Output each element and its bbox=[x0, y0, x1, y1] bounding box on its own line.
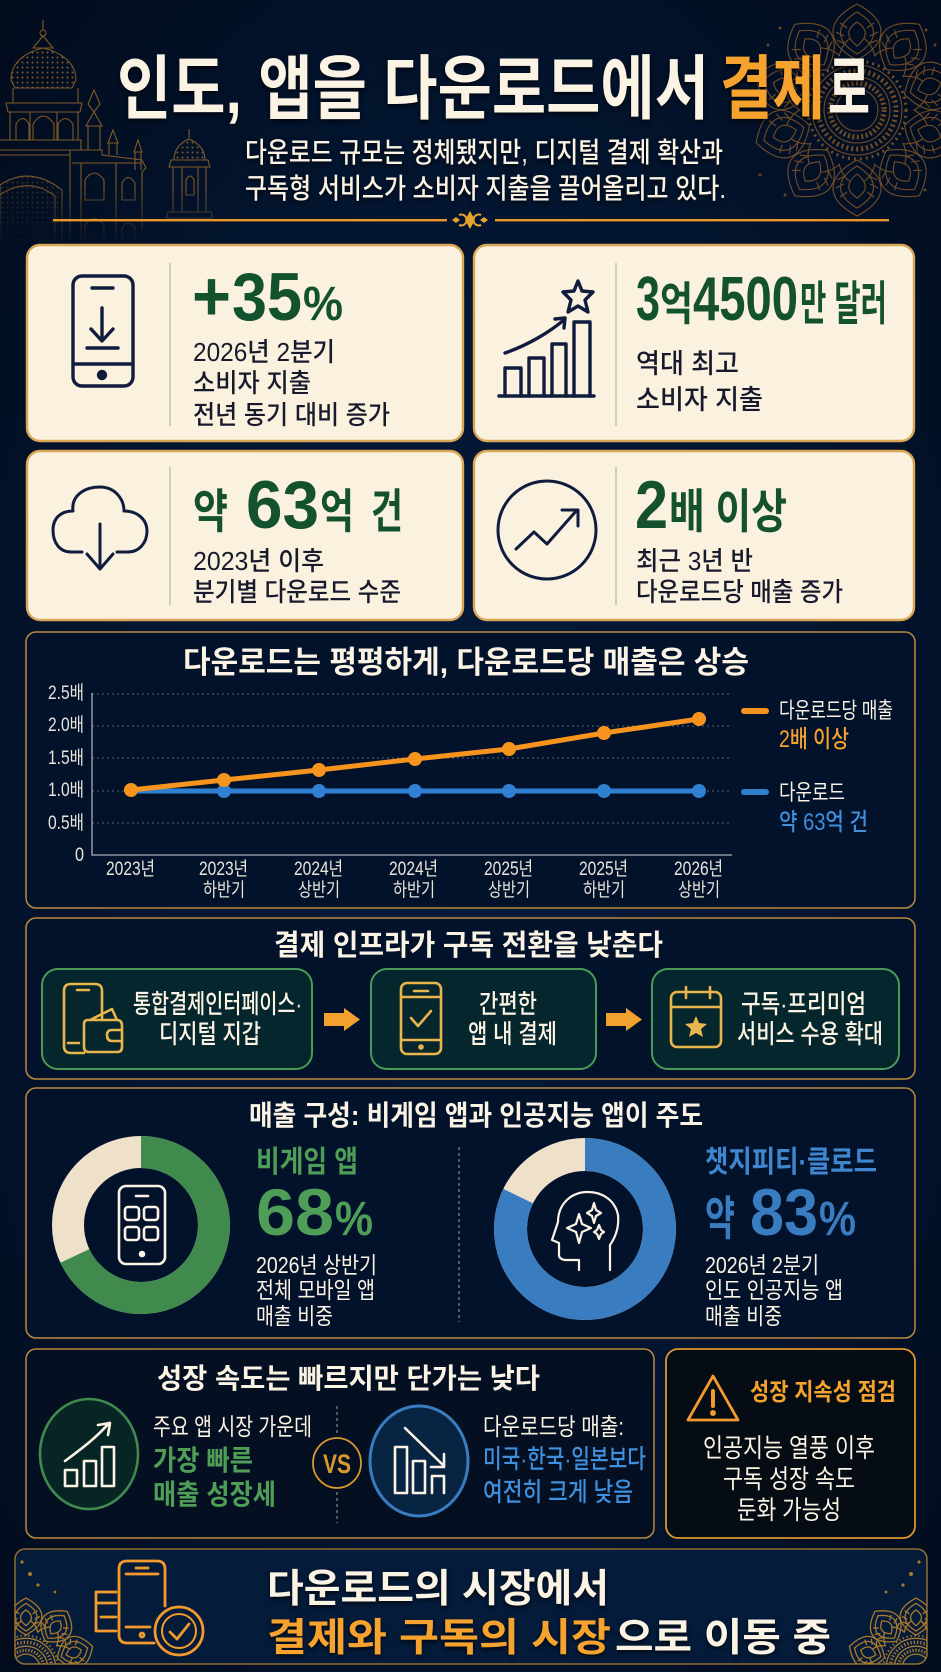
step text bbox=[737, 989, 883, 1049]
text: low revenue per download: 여전히 크게 낮음 bbox=[483, 1477, 633, 1507]
y axis labels: 0.5배 bbox=[48, 812, 84, 834]
x axis labels: 2024년 bbox=[294, 858, 343, 880]
stat: AI apps: 인도 인공지능 앱 bbox=[705, 1277, 843, 1303]
metric: +35%: % bbox=[303, 278, 343, 331]
stat: non-game apps bbox=[256, 1146, 377, 1329]
icon: app grid phone bbox=[119, 1186, 165, 1264]
y axis labels bbox=[48, 682, 84, 866]
title: 인도, 앱을 다운로드에서 bbox=[117, 50, 709, 128]
legend: downloads bbox=[744, 780, 868, 836]
panel: KPI +35% bbox=[27, 245, 463, 441]
text: fastest growth bbox=[153, 1414, 312, 1510]
subtitle: 다운로드 규모는 정체됐지만, 디지털 결제 확산과 bbox=[245, 137, 723, 168]
icon: rising bars with star bbox=[499, 281, 594, 396]
donut: ChatGPT and Claude 83% bbox=[510, 1154, 660, 1304]
step text: 구독·프리미엄 bbox=[741, 989, 866, 1019]
panel: revenue composition bbox=[26, 1088, 915, 1338]
stat: AI apps: 2026년 2분기 bbox=[705, 1252, 819, 1278]
x axis labels: 상반기 bbox=[298, 879, 340, 901]
step text: 서비스 수용 확대 bbox=[737, 1019, 883, 1049]
chart heading: 다운로드는 평평하게, 다운로드당 매출은 상승 bbox=[183, 645, 749, 680]
stat: non-game apps: 전체 모바일 앱 bbox=[256, 1277, 375, 1303]
stat: AI apps: 매출 비중 bbox=[705, 1303, 782, 1329]
icon: green growth circle bbox=[40, 1399, 138, 1509]
legend: revenue per download: 2배 이상 bbox=[779, 726, 849, 753]
chart axes and grid bbox=[92, 693, 732, 855]
metric: 약 63억 건: 63 bbox=[246, 467, 319, 543]
icon: blue decline circle bbox=[370, 1406, 468, 1516]
panel: KPI 3억4500만 달러 bbox=[474, 245, 914, 441]
subtitle bbox=[245, 137, 726, 204]
metric: +35% bbox=[192, 257, 343, 335]
metric: 3억4500만 달러 bbox=[636, 265, 887, 334]
donut: non-game 68% bbox=[68, 1152, 214, 1298]
x axis labels: 2026년 bbox=[674, 858, 723, 880]
legend: revenue per download: 다운로드당 매출 bbox=[779, 698, 893, 723]
metric: 3억4500만 달러: 억 bbox=[660, 278, 693, 330]
growth heading: 성장 속도는 빠르지만 단가는 낮다 bbox=[157, 1363, 540, 1394]
panel: sustainability check bbox=[666, 1349, 915, 1538]
description bbox=[636, 546, 843, 607]
x axis labels: 하반기 bbox=[203, 879, 245, 901]
y axis labels: 2.5배 bbox=[48, 682, 84, 704]
callout text: 둔화 가능성 bbox=[737, 1495, 841, 1525]
y axis labels: 1.5배 bbox=[48, 747, 84, 769]
icon: phone check bbox=[401, 983, 441, 1054]
arrow: step 1 to 2 bbox=[324, 1008, 360, 1031]
icon: phone download bbox=[73, 276, 133, 386]
panel: conclusion banner bbox=[0, 1549, 941, 1672]
legend: downloads: 약 63억 건 bbox=[779, 809, 868, 836]
series: downloads bbox=[131, 784, 706, 798]
panel: KPI 약 63억 건 bbox=[27, 451, 463, 620]
description: 2026년 2분기 bbox=[193, 337, 335, 367]
description bbox=[636, 349, 763, 415]
metric: 3억4500만 달러: 만 달러 bbox=[800, 277, 887, 330]
x axis labels: 2023년 bbox=[106, 858, 155, 880]
callout text bbox=[703, 1433, 875, 1525]
x axis labels: 상반기 bbox=[678, 879, 720, 901]
step 2: easy in-app payment bbox=[371, 969, 596, 1069]
text: low revenue per download: 다운로드당 매출: bbox=[483, 1414, 624, 1441]
icon: trend circle bbox=[498, 481, 596, 579]
description: 전년 동기 대비 증가 bbox=[193, 400, 390, 430]
stat: non-game apps: 비게임 앱 bbox=[256, 1146, 358, 1179]
icon: phone and wallet bbox=[64, 984, 122, 1053]
description bbox=[193, 337, 390, 430]
stat: non-game apps: 68 bbox=[256, 1175, 334, 1249]
metric: +35%: 35 bbox=[232, 259, 302, 335]
conclusion text bbox=[267, 1568, 831, 1660]
subtitle: 구독형 서비스가 소비자 지출을 끌어올리고 있다. bbox=[245, 173, 726, 204]
description: 소비자 지출 bbox=[636, 385, 763, 415]
conclusion text: 다운로드의 시장에서 bbox=[267, 1568, 609, 1611]
description: 역대 최고 bbox=[636, 349, 739, 379]
decoration: temple silhouette bbox=[0, 20, 213, 240]
stat: AI apps: 약 bbox=[705, 1192, 735, 1245]
title divider ornament bbox=[53, 211, 889, 229]
x axis labels: 상반기 bbox=[488, 879, 530, 901]
step 3: subscription acceptance bbox=[652, 969, 899, 1069]
composition heading: 매출 구성: 비게임 앱과 인공지능 앱이 주도 bbox=[249, 1100, 703, 1131]
icon: phone, card and verified check bbox=[96, 1561, 203, 1655]
x axis labels: 2023년 bbox=[199, 858, 248, 880]
icon: cloud download bbox=[53, 487, 147, 569]
metric: 2배 이상: 배 이상 bbox=[669, 485, 787, 538]
step text: 디지털 지갑 bbox=[159, 1019, 261, 1049]
x axis labels bbox=[106, 858, 723, 901]
text: fastest growth: 가장 빠른 bbox=[153, 1445, 253, 1476]
description: 소비자 지출 bbox=[193, 368, 311, 398]
step text: 간편한 bbox=[479, 989, 537, 1019]
step text bbox=[468, 989, 557, 1049]
icon: head with sparkles bbox=[552, 1192, 618, 1270]
series: revenue per download bbox=[124, 712, 706, 797]
arrow: step 2 to 3 bbox=[606, 1008, 642, 1031]
callout text: 인공지능 열풍 이후 bbox=[703, 1433, 875, 1463]
step text: 앱 내 결제 bbox=[468, 1019, 557, 1049]
metric: 2배 이상: 2 bbox=[635, 467, 668, 543]
callout text: 구독 성장 속도 bbox=[723, 1464, 855, 1494]
stat: AI apps: 챗지피티·클로드 bbox=[705, 1146, 877, 1179]
metric: 3억4500만 달러: 4500 bbox=[693, 265, 798, 334]
metric: 약 63억 건 bbox=[193, 467, 403, 543]
metric: 약 63억 건: 억 bbox=[320, 485, 354, 538]
panel: KPI 2배 이상 bbox=[474, 451, 914, 620]
y axis labels: 1.0배 bbox=[48, 779, 84, 801]
step text bbox=[133, 989, 302, 1049]
step 1: UPI and digital wallet bbox=[42, 969, 312, 1069]
x axis labels: 2025년 bbox=[579, 858, 628, 880]
conclusion text: 으로 이동 중 bbox=[615, 1617, 831, 1660]
description bbox=[193, 546, 401, 607]
x axis labels: 2025년 bbox=[484, 858, 533, 880]
x axis labels: 하반기 bbox=[393, 879, 435, 901]
metric: 2배 이상 bbox=[635, 467, 787, 543]
description: 2023년 이후 bbox=[193, 546, 324, 576]
callout heading: 성장 지속성 점검 bbox=[750, 1379, 896, 1406]
conclusion text: 결제와 구독의 시장 bbox=[267, 1617, 611, 1660]
metric: 약 63억 건: 약 bbox=[193, 485, 228, 538]
x axis labels: 2024년 bbox=[389, 858, 438, 880]
panel: growth versus unit price bbox=[26, 1349, 654, 1538]
stat: AI apps: 83 bbox=[750, 1175, 818, 1249]
stat: AI apps: % bbox=[819, 1193, 856, 1246]
icon: warning triangle bbox=[688, 1376, 738, 1420]
stat: non-game apps: 2026년 상반기 bbox=[256, 1252, 377, 1278]
panel: line chart bbox=[26, 632, 915, 908]
text: fastest growth: 매출 성장세 bbox=[153, 1479, 276, 1510]
legend: downloads: 다운로드 bbox=[779, 780, 845, 805]
decoration: corner mandalas bbox=[0, 1560, 941, 1672]
description: 분기별 다운로드 수준 bbox=[193, 577, 401, 607]
panel: payment infrastructure flow bbox=[26, 918, 915, 1079]
metric: 약 63억 건: 건 bbox=[371, 485, 403, 538]
title: 로 bbox=[828, 50, 870, 128]
stat: non-game apps: 매출 비중 bbox=[256, 1303, 333, 1329]
text: low revenue per download: 미국·한국·일본보다 bbox=[483, 1444, 646, 1474]
legend: revenue per download bbox=[744, 698, 893, 753]
vs badge: VS bbox=[323, 1449, 351, 1479]
icon: calendar star bbox=[671, 987, 721, 1047]
decoration: mandala bbox=[745, 3, 941, 217]
text: low revenue per download bbox=[483, 1414, 646, 1507]
metric: 3억4500만 달러: 3 bbox=[636, 265, 660, 334]
x axis labels: 하반기 bbox=[583, 879, 625, 901]
metric: +35%: + bbox=[192, 257, 231, 335]
vs badge bbox=[313, 1438, 361, 1488]
step text: 통합결제인터페이스· bbox=[133, 989, 302, 1019]
stat: AI apps bbox=[705, 1146, 877, 1329]
text: fastest growth: 주요 앱 시장 가운데 bbox=[153, 1414, 312, 1441]
title: 결제 bbox=[720, 50, 825, 128]
y axis labels: 2.0배 bbox=[48, 714, 84, 736]
description: 최근 3년 반 bbox=[636, 546, 753, 576]
stat: non-game apps: % bbox=[335, 1193, 373, 1246]
y axis labels: 0 bbox=[75, 845, 84, 866]
description: 다운로드당 매출 증가 bbox=[636, 577, 843, 607]
flow heading: 결제 인프라가 구독 전환을 낮춘다 bbox=[274, 929, 663, 962]
